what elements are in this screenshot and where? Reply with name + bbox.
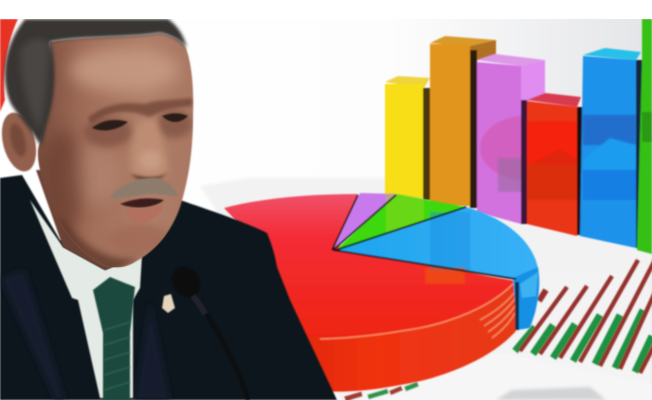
- pie: reflection: [425, 268, 465, 284]
- face shading details: [42, 48, 192, 275]
- neck: [35, 168, 114, 271]
- pie: red top: [224, 194, 516, 337]
- left eye: [92, 120, 128, 130]
- right eye: [162, 113, 188, 122]
- bar: orange: [430, 36, 496, 208]
- pie: yellow bar reflection: [386, 194, 424, 232]
- left jaw shadow: [42, 130, 82, 240]
- lapel shading: [0, 270, 170, 400]
- tie: [93, 277, 135, 400]
- lower jaw shadow: [60, 215, 140, 275]
- cheek light: [69, 147, 121, 203]
- red backdrop at left: [0, 19, 18, 112]
- pie: purple wedge: [333, 193, 396, 250]
- hair: [5, 19, 187, 146]
- person: [0, 19, 337, 400]
- pie: red side wall: [306, 244, 518, 393]
- microphone: [167, 262, 248, 400]
- ear inner shadow: [9, 123, 27, 157]
- pie: orange bar reflection: [430, 212, 470, 272]
- bar: green: [637, 19, 652, 254]
- nose tip light: [139, 150, 161, 170]
- nostril shadow: [130, 172, 168, 181]
- background: [202, 19, 652, 400]
- right eye socket: [156, 110, 192, 138]
- bar: yellow: [385, 76, 430, 200]
- nose: [130, 118, 168, 181]
- bottom stripes: [345, 384, 418, 399]
- forehead light: [70, 48, 180, 92]
- moustache: [110, 178, 178, 199]
- bar: purple: [476, 52, 546, 226]
- lower paper sheet: [344, 382, 420, 400]
- face: [38, 33, 193, 267]
- left eye socket: [84, 117, 132, 147]
- striped floor chart: [340, 258, 652, 400]
- pie chart: [224, 193, 539, 392]
- pie: green wedge: [336, 194, 466, 250]
- pie: black cut lines: [332, 195, 516, 279]
- pie: side stripes: [480, 292, 515, 338]
- suit: [0, 175, 337, 400]
- chin: [108, 224, 172, 256]
- bar chart: 3D coloured bars: [385, 19, 652, 254]
- grey sheet edge: [496, 387, 606, 400]
- lapel pin: [162, 294, 175, 313]
- pie: blue side wall: [513, 267, 539, 330]
- pie: red highlight rim: [320, 283, 514, 339]
- shirt collar: [30, 200, 142, 398]
- bar: blue: [580, 48, 642, 248]
- green stripes: [515, 310, 652, 372]
- tie pattern: [104, 322, 130, 390]
- mouth line: [120, 198, 164, 207]
- brow furrow: [88, 98, 192, 124]
- red stripes: [520, 258, 652, 373]
- ear: [0, 112, 38, 172]
- bar: red: [527, 93, 583, 236]
- hair grey streak: [20, 38, 50, 130]
- pie: blue wedge: [338, 207, 538, 280]
- lower lip: [125, 203, 164, 223]
